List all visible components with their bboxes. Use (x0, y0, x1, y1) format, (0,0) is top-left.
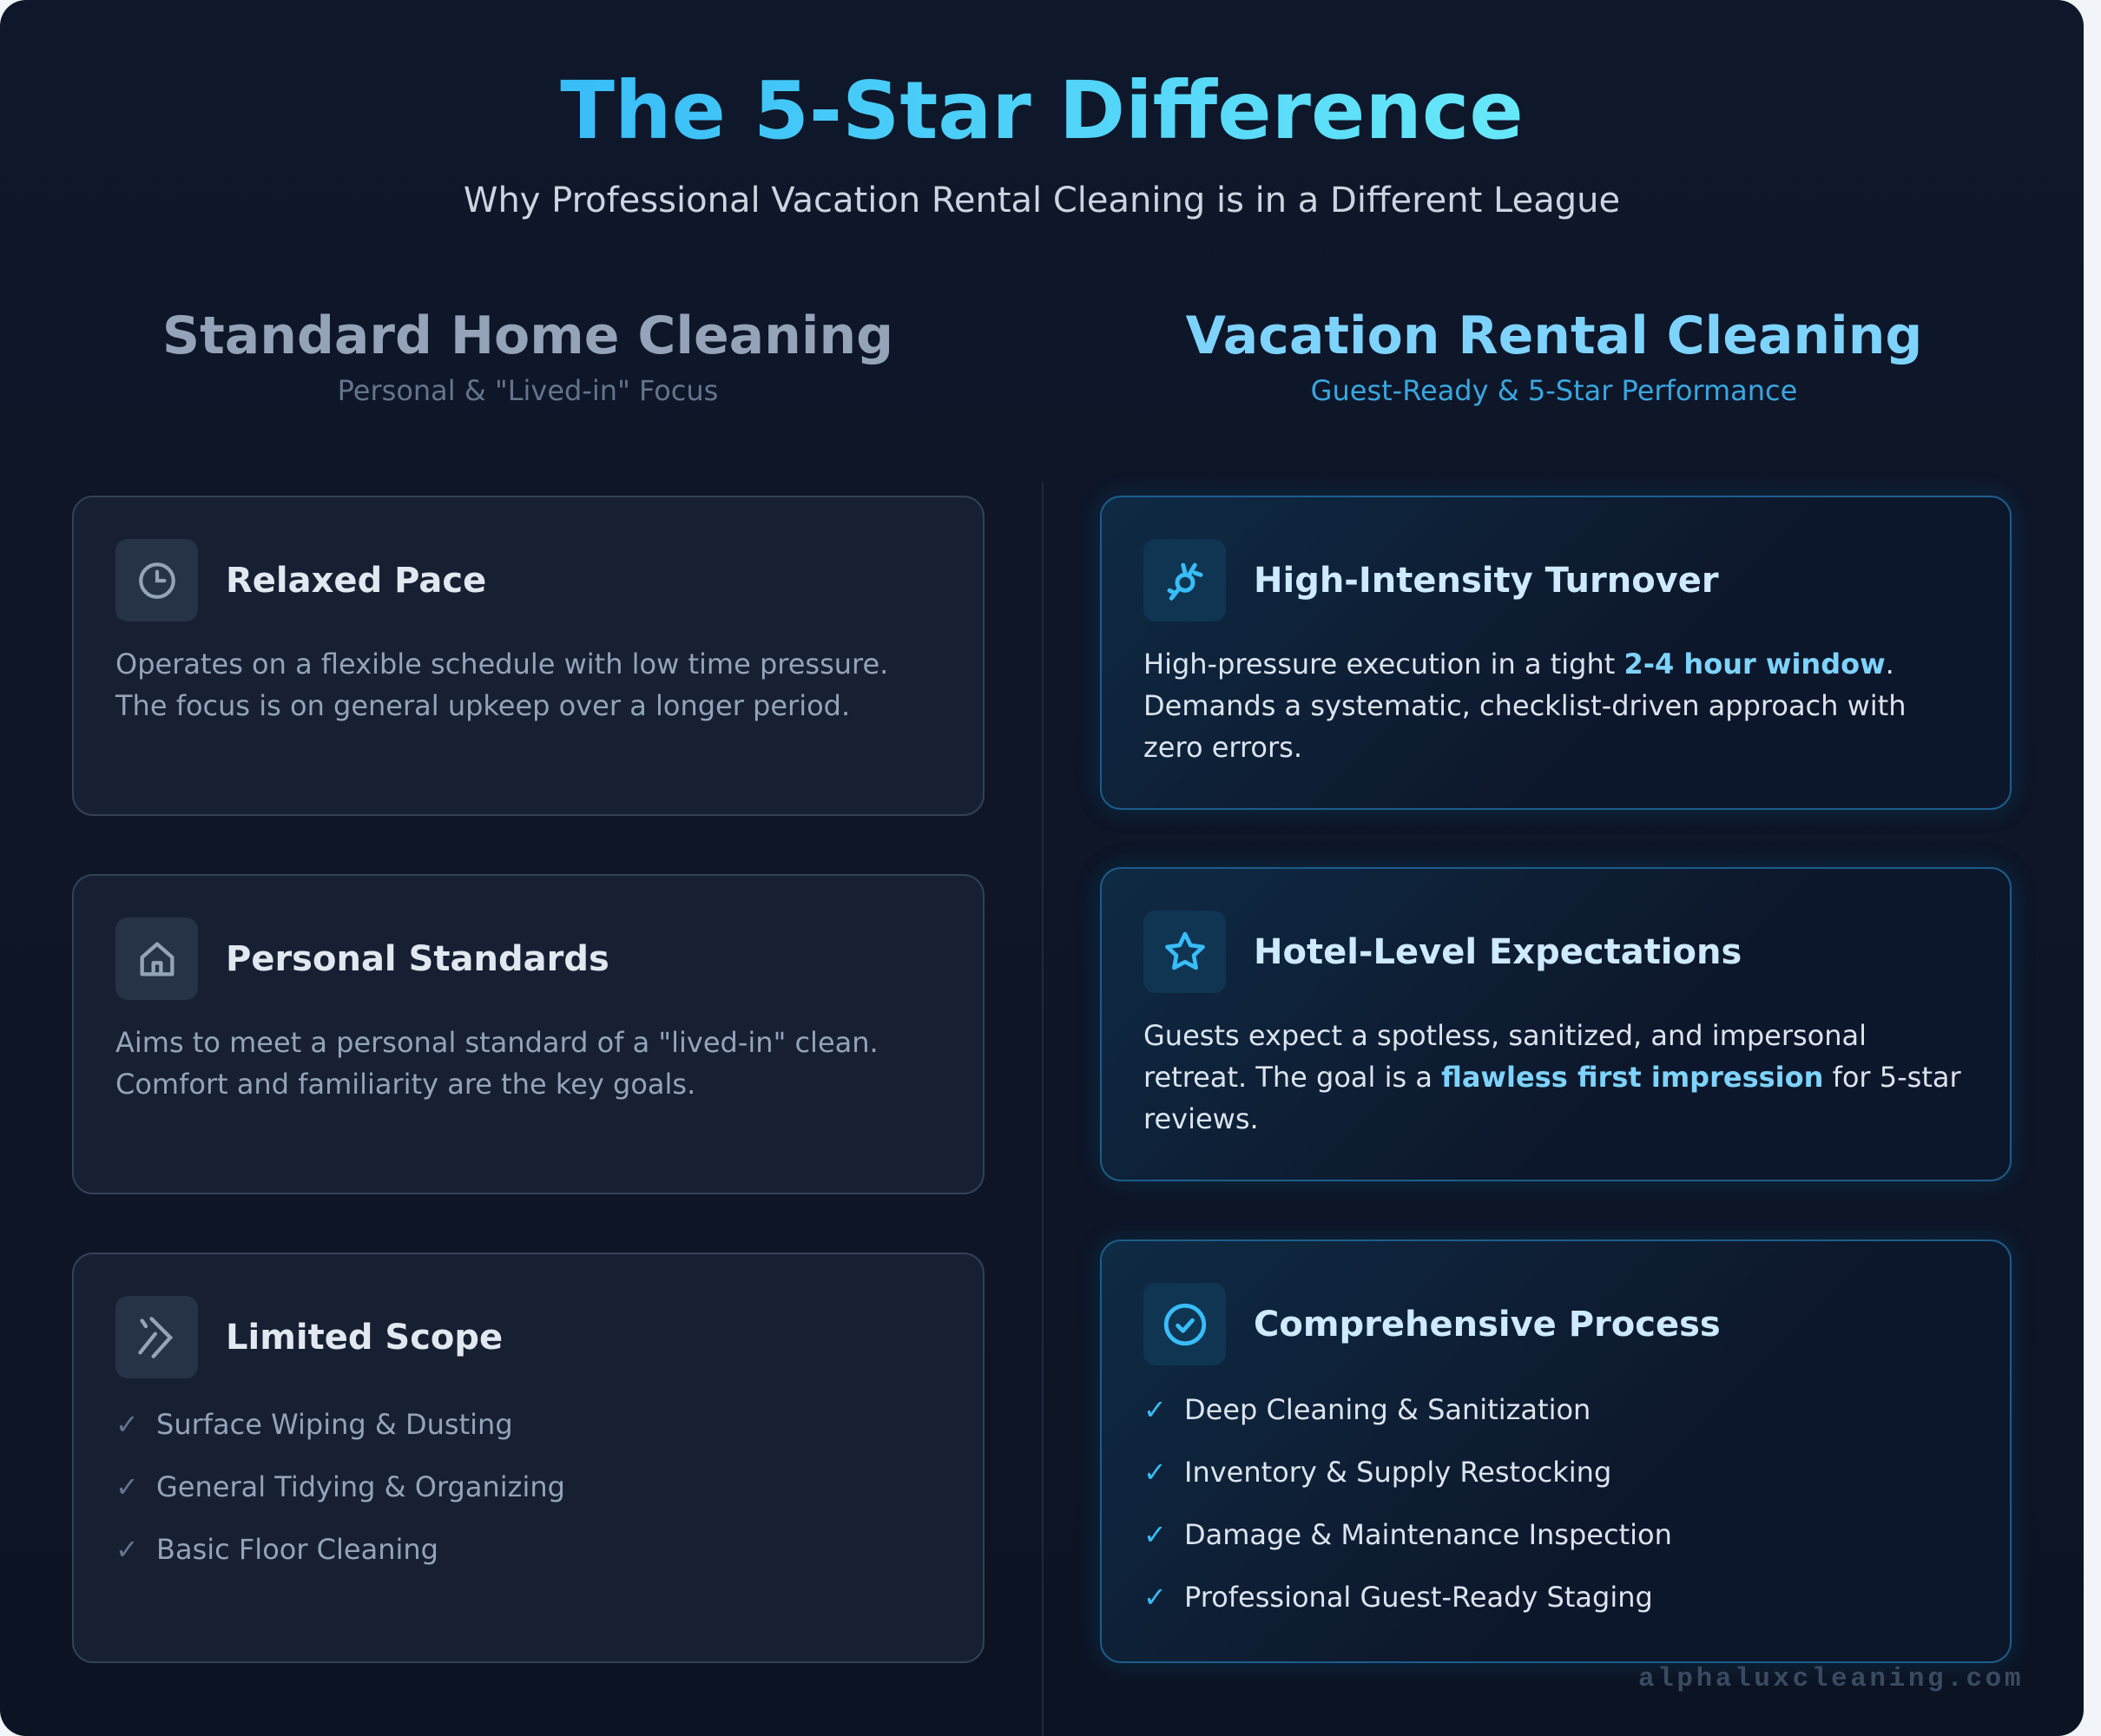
column header: vacation (1186, 306, 1922, 407)
text (1143, 1019, 1961, 1135)
panel: limited scope: ✓ (115, 1533, 139, 1566)
icon: spray (1143, 539, 1226, 621)
panel: high-intensity turnover (1100, 496, 2012, 810)
watermark: alphaluxcleaning.com (1638, 1664, 2024, 1694)
panel: personal standards (72, 874, 985, 1194)
panel: comprehensive process (1100, 1240, 2012, 1663)
text: retreat. The goal is a flawless first impression for 5-star (1143, 1061, 1961, 1094)
panel: comprehensive process: ✓ (1143, 1518, 1167, 1551)
text: Guests expect a spotless, sanitized, and impersonal (1143, 1019, 1867, 1052)
heading: Hotel-Level Expectations (1254, 932, 1742, 972)
icon: clock (115, 539, 198, 621)
text: reviews. (1143, 1102, 1259, 1135)
column header: standard: Personal & "Lived-in" Focus (338, 374, 718, 407)
column header: standard (162, 306, 893, 407)
panel: comprehensive process: ✓ (1143, 1581, 1167, 1614)
icon: house (115, 917, 198, 1000)
icon: chevrons (115, 1296, 198, 1378)
text (1143, 648, 1906, 764)
text: Demands a systematic, checklist-driven approach with (1143, 689, 1906, 722)
panel: limited scope: ✓ (115, 1470, 139, 1503)
heading: Limited Scope (226, 1318, 503, 1358)
list: Deep Cleaning & Sanitization (1184, 1393, 1591, 1426)
icon: check circle (1143, 1283, 1226, 1365)
panel: hotel-level expectations (1100, 867, 2012, 1181)
heading: Personal Standards (226, 939, 609, 979)
panel: limited scope: General Tidying & Organizing (156, 1470, 565, 1503)
panel: comprehensive process: ✓ (1143, 1456, 1167, 1489)
list: ✓ (115, 1408, 139, 1441)
text: Operates on a flexible schedule with low time pressure. The focus is on general upkeep over a longer period. (115, 648, 888, 722)
panel: comprehensive process: Professional Guest-Ready Staging (1184, 1581, 1653, 1614)
heading: Comprehensive Process (1254, 1305, 1721, 1345)
icon: star (1143, 911, 1226, 993)
panel: comprehensive process: Damage & Maintenance Inspection (1184, 1518, 1672, 1551)
list: Surface Wiping & Dusting (156, 1408, 513, 1441)
column header: standard: Standard Home Cleaning (162, 306, 893, 366)
text: Aims to meet a personal standard of a "lived-in" clean. Comfort and familiarity are the key goals. (115, 1026, 879, 1101)
column header: vacation: Guest-Ready & 5-Star Performance (1311, 374, 1797, 407)
subtitle: Why Professional Vacation Rental Cleaning is in a Different League (464, 181, 1620, 220)
panel: comprehensive process: Inventory & Supply Restocking (1184, 1456, 1611, 1489)
heading: High-Intensity Turnover (1254, 561, 1719, 601)
panel: limited scope: Basic Floor Cleaning (156, 1533, 438, 1566)
text: zero errors. (1143, 731, 1302, 764)
panel: relaxed pace (72, 496, 985, 816)
column header: vacation: Vacation Rental Cleaning (1186, 306, 1922, 366)
list: ✓ (1143, 1393, 1167, 1426)
text: High-pressure execution in a tight 2-4 hour window. (1143, 648, 1894, 681)
title: The 5-Star Difference (560, 64, 1524, 157)
panel: limited scope (72, 1253, 985, 1663)
heading: Relaxed Pace (226, 561, 486, 601)
